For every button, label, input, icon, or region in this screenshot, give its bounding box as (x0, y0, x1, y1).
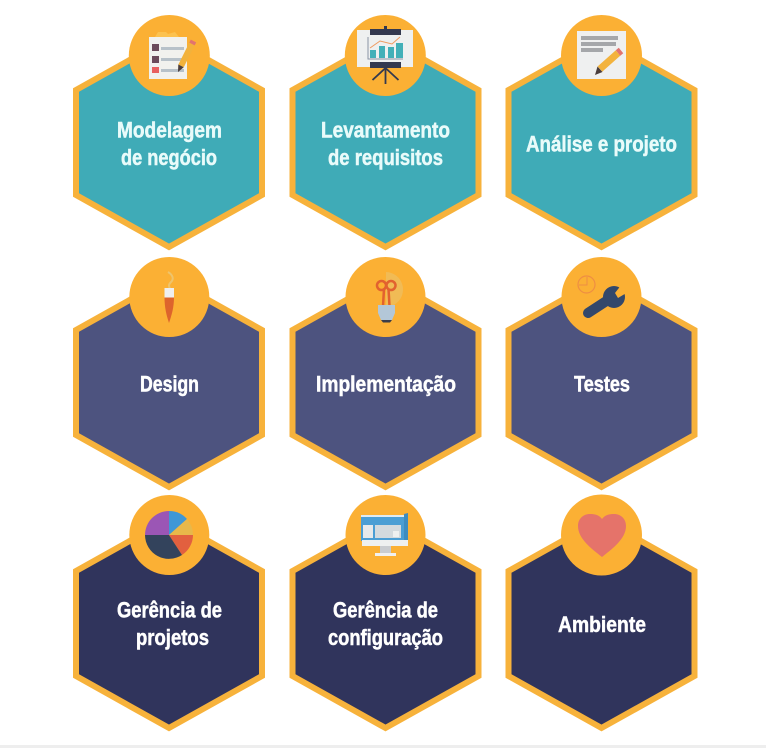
icon: light bulb (346, 257, 426, 337)
icon: presentation board (345, 15, 426, 96)
heading: Testes: Testes (574, 372, 630, 396)
heading: Gerência de configuração: Gerência de (333, 598, 438, 622)
heading: Gerência de configuração: configuração (328, 625, 443, 650)
heading: Gerência de projetos: Gerência de (117, 598, 222, 622)
panel: Levantamento de requisitos (292, 15, 478, 247)
heading: Modelagem de negócio (117, 118, 222, 170)
icon: checklist and pencil (129, 15, 210, 96)
panel: Implementação (292, 257, 478, 487)
icon: heart (561, 494, 642, 576)
heading: Análise e projeto: Análise e projeto (526, 132, 677, 156)
icon: desktop monitor (346, 495, 426, 575)
icon: wrench and clock (562, 257, 642, 337)
panel: Ambiente (508, 494, 694, 728)
heading: Implementação: Implementação (316, 372, 456, 396)
heading: Ambiente: Ambiente (558, 612, 646, 637)
icon: document and pencil (561, 15, 642, 96)
panel: Modelagem de negócio (76, 15, 262, 247)
heading: Gerência de configuração (328, 598, 443, 650)
heading: Gerência de projetos (117, 598, 222, 650)
heading: Levantamento de requisitos: de requisitos (328, 145, 443, 170)
icon: pie chart (129, 495, 209, 575)
heading: Modelagem de negócio: Modelagem (117, 118, 222, 142)
heading: Gerência de projetos: projetos (136, 625, 209, 650)
heading: Levantamento de requisitos (321, 118, 450, 170)
heading: Levantamento de requisitos: Levantamento (321, 118, 450, 142)
panel: Design (76, 257, 262, 487)
icon: paintbrush (129, 257, 209, 337)
heading: Modelagem de negócio: de negócio (121, 145, 217, 170)
panel: Testes (508, 257, 694, 487)
panel: Gerência de configuração (292, 495, 478, 728)
panel: Análise e projeto (508, 15, 694, 247)
heading: Design: Design (140, 372, 199, 396)
panel: Gerência de projetos (76, 495, 262, 728)
